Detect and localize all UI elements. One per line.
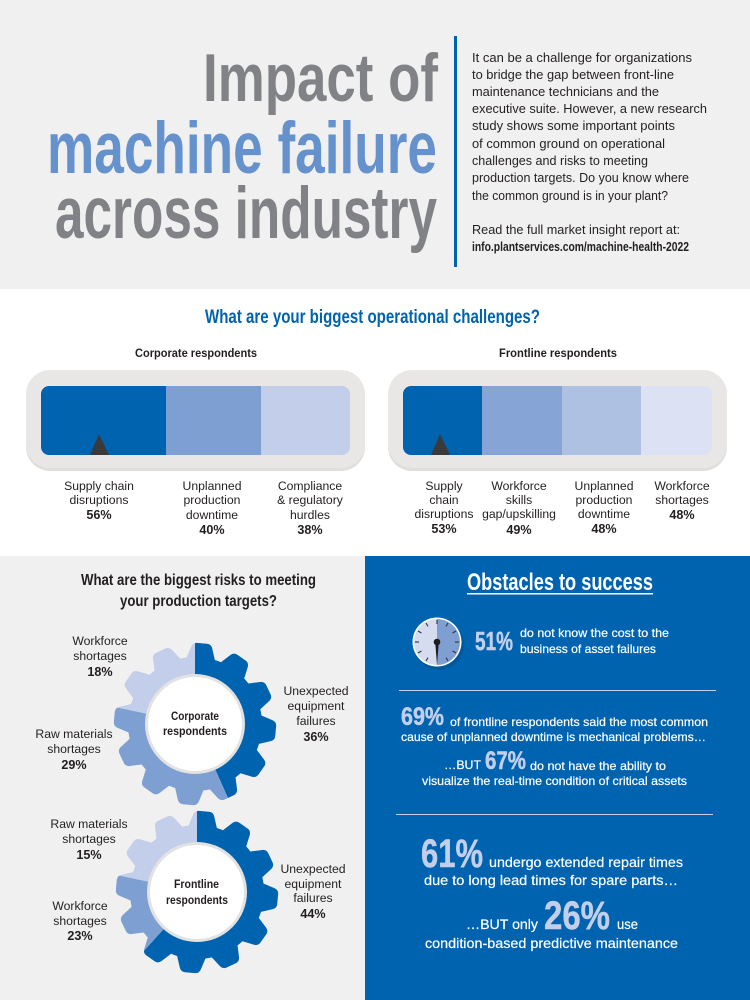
intro text: info.plantservices.com/machine-health-2022 bbox=[472, 239, 689, 254]
label: raw materials frontline: shortages bbox=[62, 832, 116, 846]
intro text: of common ground on operational bbox=[472, 136, 665, 151]
intro text: executive suite. However, a new research bbox=[472, 101, 707, 116]
label: supply chain frontline: chain bbox=[429, 493, 459, 507]
label: supply chain corporate: Supply chain bbox=[64, 479, 134, 493]
title bbox=[47, 40, 438, 254]
label: supply chain corporate: 56% bbox=[86, 508, 112, 522]
heading: obstacles: Obstacles to success bbox=[467, 569, 653, 596]
label: shortages frontline: Workforce bbox=[654, 479, 710, 493]
panel: obstacles to success bbox=[365, 556, 750, 1000]
label: raw materials corporate bbox=[35, 727, 113, 772]
heading: production risks: your production targets? bbox=[120, 593, 277, 610]
chart: corporate bar bbox=[26, 370, 365, 471]
stat: 51 percent bbox=[475, 626, 669, 656]
label: skills frontline: 49% bbox=[506, 523, 532, 537]
stat: 51 percent: do not know the cost to the bbox=[520, 626, 669, 640]
title: machine failure bbox=[47, 108, 437, 189]
label: workforce corporate: Workforce bbox=[72, 634, 128, 648]
chart: frontline gear bbox=[116, 810, 278, 974]
panel: header bbox=[0, 0, 750, 289]
label: unexpected corporate: Unexpected bbox=[283, 684, 349, 698]
intro text bbox=[472, 50, 707, 254]
label: supply chain frontline: Supply bbox=[425, 479, 464, 493]
label: downtime corporate bbox=[183, 479, 241, 537]
intro text: production targets. Do you know where bbox=[472, 170, 689, 185]
divider bar bbox=[454, 36, 457, 267]
stat: 26 percent: use bbox=[617, 916, 638, 932]
stat: 26 percent: …BUT only bbox=[466, 916, 538, 932]
gear label bbox=[163, 709, 227, 738]
label: raw materials frontline: 15% bbox=[76, 848, 102, 862]
label: workforce corporate bbox=[72, 634, 128, 679]
label: compliance corporate bbox=[277, 479, 344, 537]
label: downtime corporate: Unplanned bbox=[183, 479, 241, 493]
label: unexpected corporate: 36% bbox=[303, 730, 329, 744]
stat: 26 percent: 26% bbox=[544, 894, 610, 938]
label: raw materials corporate: 29% bbox=[61, 758, 87, 772]
label: downtime frontline: downtime bbox=[578, 507, 630, 521]
label: skills frontline: gap/upskilling bbox=[482, 507, 556, 521]
stat: 67 percent: 67% bbox=[485, 747, 526, 775]
stat: 69 percent: 69% bbox=[401, 703, 444, 731]
label: raw materials frontline: Raw materials bbox=[50, 817, 128, 831]
label: downtime frontline bbox=[575, 479, 633, 536]
stat: 51 percent: business of asset failures bbox=[520, 642, 656, 656]
label: unexpected frontline bbox=[280, 862, 346, 921]
corporate subheading: Corporate respondents bbox=[135, 346, 257, 360]
label: compliance corporate: Compliance bbox=[278, 479, 342, 493]
label: downtime corporate: 40% bbox=[199, 523, 225, 537]
label: downtime frontline: production bbox=[576, 493, 632, 507]
marker: frontline bbox=[431, 434, 450, 455]
intro text: study shows some important points bbox=[472, 118, 675, 133]
label: workforce frontline bbox=[52, 899, 108, 943]
label: compliance corporate: & regulatory bbox=[277, 493, 344, 507]
stat: 51 percent: 51% bbox=[475, 626, 513, 656]
stat: 26 percent: condition-based predictive maintenance bbox=[425, 935, 678, 951]
chart: corporate gear bbox=[114, 642, 276, 806]
label: downtime corporate: downtime bbox=[186, 508, 238, 522]
label: downtime frontline: Unplanned bbox=[575, 479, 633, 493]
stat: 69 percent: of frontline respondents said the most common bbox=[450, 715, 708, 729]
label: supply chain frontline: disruptions bbox=[415, 507, 473, 521]
label: unexpected corporate: equipment bbox=[288, 699, 345, 713]
label: supply chain corporate bbox=[64, 479, 134, 522]
heading: production risks bbox=[81, 572, 316, 610]
label: unexpected corporate bbox=[283, 684, 349, 744]
stat: 67 percent bbox=[422, 747, 687, 788]
label: skills frontline: skills bbox=[506, 493, 532, 507]
label: unexpected frontline: 44% bbox=[300, 907, 326, 921]
label: raw materials corporate: shortages bbox=[47, 742, 101, 756]
label: workforce frontline: Workforce bbox=[52, 899, 108, 913]
gear label: Corporate bbox=[171, 709, 219, 723]
stat: 69 percent bbox=[401, 703, 708, 744]
label: raw materials corporate: Raw materials bbox=[35, 727, 113, 741]
label: workforce corporate: shortages bbox=[73, 649, 127, 663]
stat: 61 percent: due to long lead times for spare parts… bbox=[424, 872, 678, 888]
label: shortages frontline: shortages bbox=[655, 493, 709, 507]
icon: clock bbox=[412, 618, 464, 670]
title: Impact of bbox=[203, 40, 438, 116]
label: shortages frontline: 48% bbox=[669, 508, 695, 522]
gear label: respondents bbox=[163, 724, 227, 738]
label: raw materials frontline bbox=[50, 817, 128, 862]
gear label: respondents bbox=[166, 893, 228, 907]
label: supply chain corporate: disruptions bbox=[70, 493, 128, 507]
panel: production risks bbox=[0, 556, 365, 1000]
title: across industry bbox=[55, 173, 437, 254]
stat: 61 percent bbox=[421, 832, 683, 888]
stat: 67 percent: …BUT bbox=[444, 758, 482, 772]
label: workforce frontline: 23% bbox=[67, 929, 93, 943]
label: workforce frontline: shortages bbox=[53, 914, 107, 928]
label: workforce corporate: 18% bbox=[87, 665, 113, 679]
intro text: challenges and risks to meeting bbox=[472, 153, 648, 168]
chart: frontline bar bbox=[388, 370, 727, 471]
marker: corporate bbox=[90, 434, 109, 455]
label: skills frontline bbox=[482, 479, 556, 537]
frontline subheading: Frontline respondents bbox=[499, 346, 617, 360]
label: supply chain frontline: 53% bbox=[431, 522, 457, 536]
label: shortages frontline bbox=[654, 479, 710, 522]
label: skills frontline: Workforce bbox=[491, 479, 547, 493]
stat: 69 percent: cause of unplanned downtime is mechanical problems… bbox=[401, 730, 706, 744]
heading: operational challenges: What are your biggest operational challenges? bbox=[205, 307, 540, 328]
label: unexpected corporate: failures bbox=[296, 714, 336, 728]
stat: 26 percent bbox=[425, 894, 678, 951]
label: unexpected frontline: Unexpected bbox=[280, 862, 346, 876]
label: unexpected frontline: equipment bbox=[285, 877, 342, 891]
stat: 61 percent: undergo extended repair times bbox=[489, 854, 683, 870]
label: compliance corporate: 38% bbox=[297, 523, 323, 537]
label: supply chain frontline bbox=[415, 479, 473, 536]
label: unexpected frontline: failures bbox=[293, 891, 333, 905]
intro text: Read the full market insight report at: bbox=[472, 222, 680, 237]
label: downtime frontline: 48% bbox=[591, 522, 617, 536]
label: compliance corporate: hurdles bbox=[290, 508, 330, 522]
stat: 67 percent: do not have the ability to bbox=[530, 759, 666, 773]
stat: 61 percent: 61% bbox=[421, 832, 483, 876]
gear label: Frontline bbox=[174, 877, 219, 891]
gear label bbox=[166, 877, 228, 907]
heading: production risks: What are the biggest risks to meeting bbox=[81, 572, 316, 589]
intro text: It can be a challenge for organizations bbox=[472, 50, 692, 65]
intro text: the common ground is in your plant? bbox=[472, 188, 668, 203]
label: downtime corporate: production bbox=[184, 493, 240, 507]
panel: operational challenges bbox=[26, 309, 727, 534]
stat: 67 percent: visualize the real-time condition of critical assets bbox=[422, 774, 687, 788]
intro text: maintenance technicians and the bbox=[472, 84, 659, 99]
intro text: to bridge the gap between front-line bbox=[472, 67, 674, 82]
